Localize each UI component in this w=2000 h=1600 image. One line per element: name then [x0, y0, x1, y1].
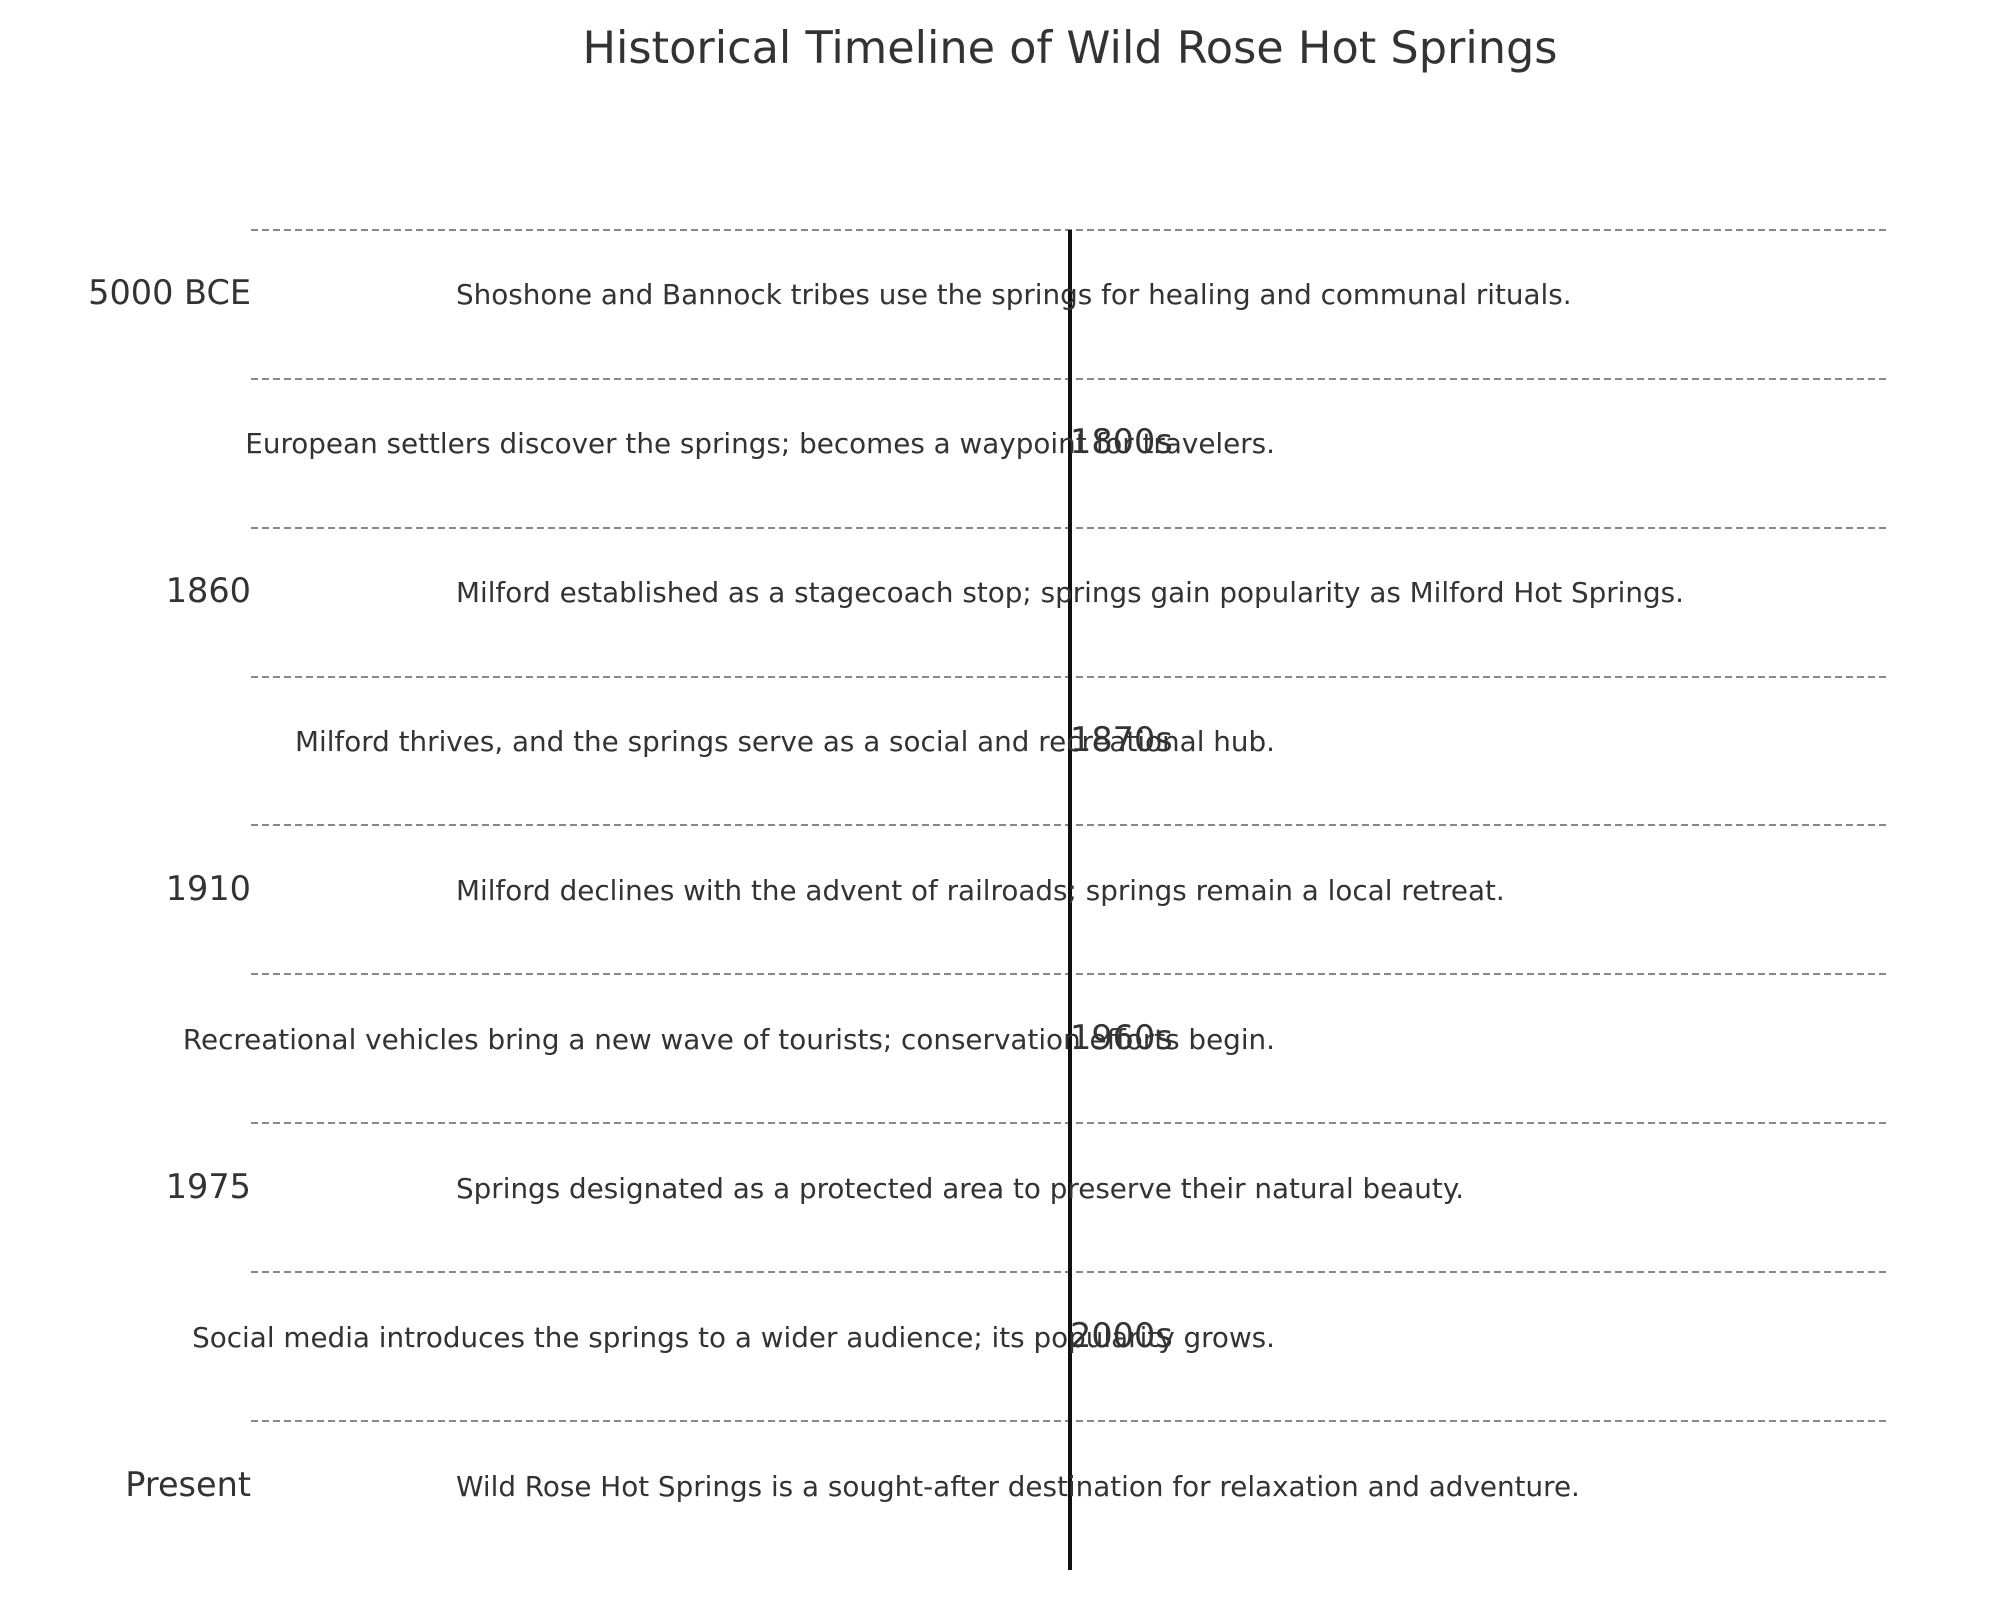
event: 1960s: Recreational vehicles bring a new wave of tourists; conservation efforts begin. [183, 1023, 1275, 1056]
event: 1910: 1910 [166, 869, 251, 908]
event: 1960s: 1960s [1070, 1018, 1173, 1057]
event: 1800s: European settlers discover the springs; becomes a waypoint for travelers. [245, 427, 1275, 460]
timeline axis [1068, 230, 1072, 1570]
event: 1860: 1860 [166, 571, 251, 610]
event: Present: Wild Rose Hot Springs is a sought-after destination for relaxation and adventure. [456, 1470, 1580, 1503]
event: 2000s: Social media introduces the springs to a wider audience; its popularity grows. [192, 1321, 1275, 1354]
event: Present [125, 1465, 1580, 1504]
event: 1860 [166, 571, 1684, 610]
event: 1975: Springs designated as a protected area to preserve their natural beauty. [456, 1172, 1464, 1205]
event: 5000 BCE: Shoshone and Bannock tribes use the springs for healing and communal rituals. [456, 278, 1572, 311]
event: 1860: Milford established as a stagecoach stop; springs gain popularity as Milford Hot Springs. [456, 576, 1684, 609]
event: 5000 BCE: 5000 BCE [88, 273, 251, 312]
event: 1975: 1975 [166, 1167, 251, 1206]
event: 1910: Milford declines with the advent of railroads; springs remain a local retreat. [456, 874, 1505, 907]
event: 1870s: 1870s [1070, 720, 1173, 759]
event: 1910 [166, 869, 1505, 908]
event: 1800s: 1800s [1070, 422, 1173, 461]
event: 1975 [166, 1167, 1464, 1206]
event: 5000 BCE [88, 273, 1572, 312]
title: Historical Timeline of Wild Rose Hot Springs [582, 22, 1558, 74]
event: 2000s: 2000s [1070, 1316, 1173, 1355]
event: Present: Present [125, 1465, 251, 1504]
event: 1870s: Milford thrives, and the springs serve as a social and recreational hub. [295, 725, 1275, 758]
